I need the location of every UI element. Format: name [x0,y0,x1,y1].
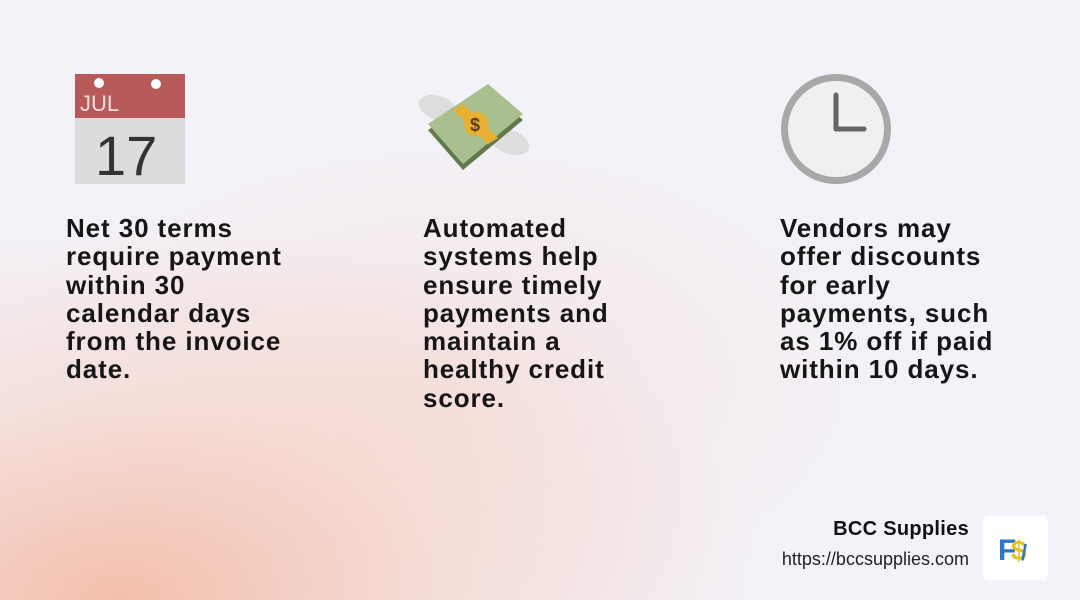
text: automated [423,213,609,413]
brand url: https://bccsupplies.com [782,549,969,569]
text: automated: Automated [423,213,567,243]
text: discounts: Vendors may [780,213,952,243]
text: automated: ensure timely [423,270,602,300]
text: net 30 [66,213,282,384]
text: discounts: payments, such [780,298,989,328]
logo: / [1021,540,1027,565]
brand name: BCC Supplies [833,518,969,540]
icon: calendar: JUL [80,91,119,116]
icon: money with wings [418,84,530,170]
logo: $ [1011,535,1027,566]
text: net 30: calendar days [66,298,251,328]
text: net 30: date. [66,354,131,384]
icon: money with wings: $ [470,115,480,135]
text: automated: maintain a [423,326,561,356]
text: discounts: offer discounts [780,241,981,271]
logo [983,516,1048,580]
text: discounts: as 1% off if paid [780,326,993,356]
icon: calendar [75,74,185,184]
logo: F [998,534,1016,567]
text: net 30: Net 30 terms [66,213,233,243]
text: automated: payments and [423,298,609,328]
text: automated: score. [423,383,505,413]
text: net 30: within 30 [66,270,185,300]
text: net 30: from the invoice [66,326,281,356]
text: discounts: within 10 days. [780,354,978,384]
icon: clock [781,74,891,184]
text: automated: systems help [423,241,599,271]
text: discounts: for early [780,270,891,300]
text: automated: healthy credit [423,354,605,384]
text: discounts [780,213,993,384]
text: net 30: require payment [66,241,282,271]
